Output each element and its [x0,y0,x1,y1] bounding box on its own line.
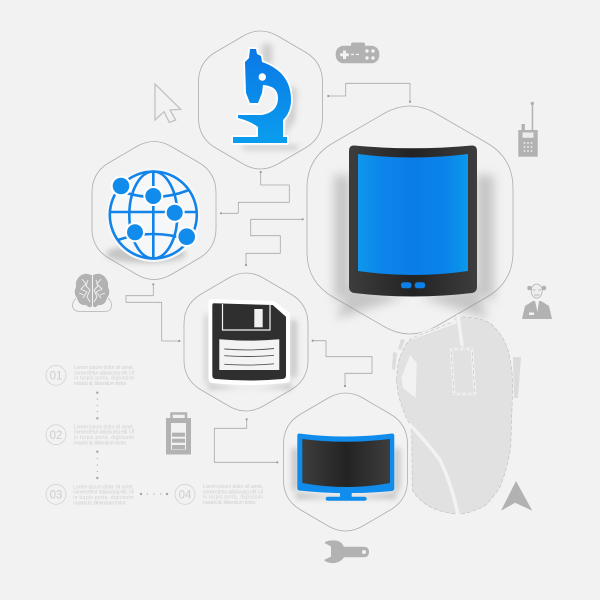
step 01: consectetur adipiscing elit. Ut [74,370,135,376]
step 04: in turpis porta, dignissim [203,495,263,501]
step 02: 02 [50,430,62,442]
icon: globe sticker [106,168,200,263]
step 04: mauris id, bibendum tortor. [203,500,256,506]
step 02: in turpis porta, dignissim [74,435,134,441]
icon: floppy disk sticker [205,299,297,390]
dotted step connectors [96,392,168,495]
icon: cursor arrow [155,84,181,122]
icon: walkie talkie [518,102,538,157]
step 04: consectetur adipiscing elit. Ut [203,489,264,495]
icon: wrench [324,540,369,563]
step 01: 01 [50,370,62,382]
step 03 [46,484,134,506]
step 01: in turpis porta, dignissim [74,376,134,382]
hexagon: microscope [198,31,322,169]
icon: battery [168,414,188,452]
step 03: in turpis porta, dignissim [73,495,134,501]
step 03: Lorem ipsum dolor sit amet, [73,484,134,490]
step 01 [46,365,135,387]
hexagon: floppy [184,273,308,411]
icon: microscope sticker [233,44,300,150]
hexagon: monitor [284,393,408,531]
step 02: consectetur adipiscing elit. Ut [74,430,135,436]
icon: navigation arrow [501,481,532,511]
step 01: mauris id, bibendum tortor. [74,381,127,387]
step 04: Lorem ipsum dolor sit amet, [203,484,263,490]
icon: tablet [334,146,494,319]
icon: curved monitor sticker [292,434,400,501]
step 04: 04 [179,490,192,502]
step 03: mauris id, bibendum tortor. [73,500,126,506]
icon: gamepad [336,42,379,63]
step 02 [46,424,135,446]
step 03: 03 [50,490,62,502]
hexagon: globe [92,142,216,280]
connector lines [126,83,411,463]
step 01: Lorem ipsum dolor sit amet, [74,365,134,371]
step 03: consectetur adipiscing elit. Ut [73,490,134,496]
step 02: mauris id, bibendum tortor. [74,440,127,446]
icon: brain [72,274,112,312]
icon: computer mouse [392,316,521,515]
icon: scientist [522,284,552,319]
step 02: Lorem ipsum dolor sit amet, [74,424,134,430]
hexagon: tablet [307,106,513,334]
step 04 [175,484,264,506]
